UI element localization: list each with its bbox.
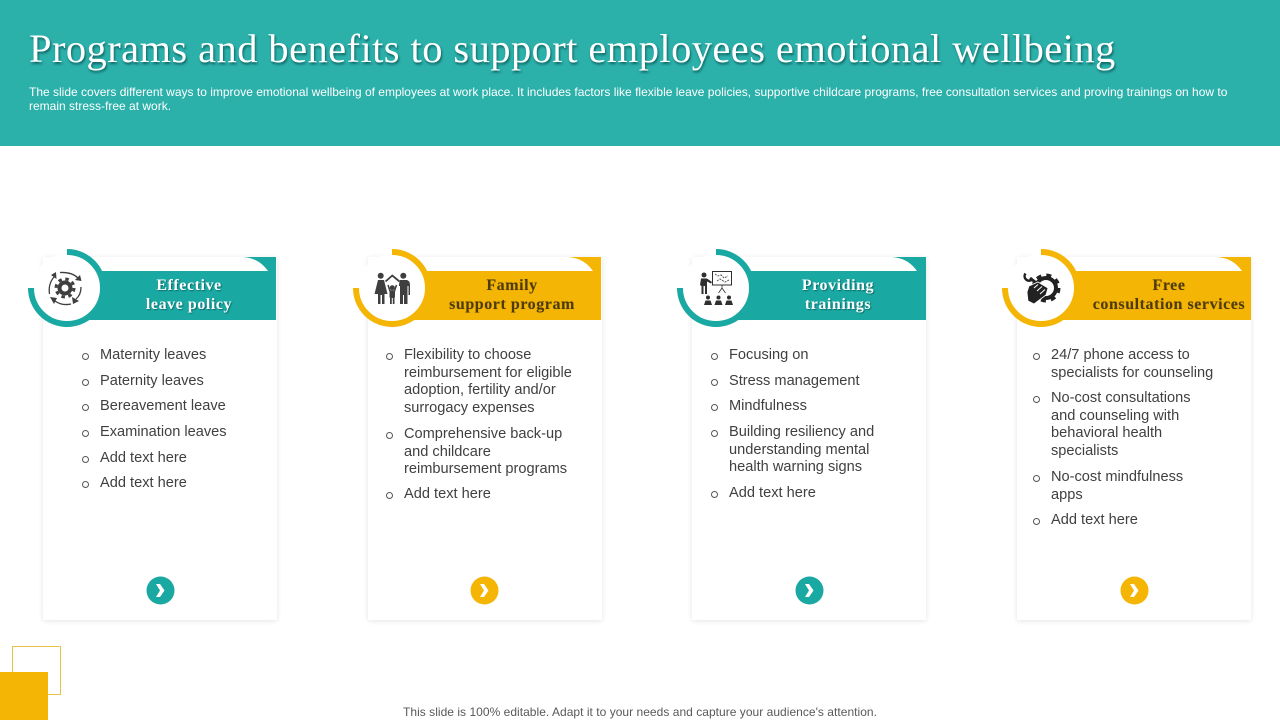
heading — [802, 277, 875, 314]
list item: Comprehensive back-up — [404, 426, 562, 442]
list item — [404, 347, 572, 418]
list item: Building resiliency and — [729, 424, 874, 440]
title: Programs and benefits to support employees emotional wellbeing — [29, 26, 1116, 71]
bullet list — [82, 347, 227, 491]
list item: Bereavement leave — [100, 398, 226, 414]
list item: 24/7 phone access to — [1051, 347, 1190, 363]
icon: arrow button — [470, 576, 498, 604]
card header with ring and support icon — [1002, 249, 1251, 327]
card header with ring and training icon — [677, 249, 926, 327]
panel: providing trainings — [677, 249, 928, 622]
list item — [729, 424, 874, 477]
icon: arrow button — [1120, 576, 1148, 604]
list item: Focusing on — [729, 347, 809, 363]
icon: presenter at board with audience — [700, 272, 733, 305]
heading: Family — [486, 277, 538, 294]
icon: arrow button — [796, 576, 824, 604]
list item — [1051, 390, 1191, 461]
footer note: This slide is 100% editable. Adapt it to your needs and capture your audience's attention. — [403, 705, 877, 719]
panel: free consultation services — [1002, 249, 1252, 622]
list item: Add text here — [404, 486, 491, 502]
list item: understanding mental — [729, 442, 869, 458]
list item: Add text here — [729, 485, 816, 501]
icon: hand with wrench and gear — [1025, 274, 1059, 304]
list item: No-cost mindfulness — [1051, 469, 1183, 485]
icon: arrow button — [146, 576, 174, 604]
header banner — [0, 0, 1280, 146]
heading: Free — [1152, 277, 1186, 294]
heading: leave policy — [146, 296, 232, 313]
list item: Add text here — [100, 450, 187, 466]
card header with ring and family icon — [353, 249, 601, 327]
subtitle description: The slide covers different ways to improve emotional wellbeing of employees at work place. It includes factors like flexible leave policies, supportive childcare programs, free consultation services and proving trainings on how to — [29, 85, 1227, 99]
heading: Effective — [156, 277, 222, 294]
heading — [146, 277, 232, 314]
list item: reimbursement programs — [404, 461, 567, 477]
list item: health warning signs — [729, 459, 862, 475]
heading: trainings — [805, 296, 871, 313]
list item: specialists for counseling — [1051, 365, 1213, 381]
bullet list — [1033, 347, 1213, 528]
subtitle description — [29, 85, 1227, 113]
list item: No-cost consultations — [1051, 390, 1191, 406]
icon: gear with cycle arrows — [49, 272, 82, 305]
list item: and childcare — [404, 444, 491, 460]
list item: Add text here — [100, 475, 187, 491]
list item: specialists — [1051, 443, 1118, 459]
bullet list — [386, 347, 572, 502]
panel: family support program — [353, 249, 604, 622]
heading — [449, 277, 575, 313]
list item: reimbursement for eligible — [404, 365, 572, 381]
heading: consultation services — [1093, 296, 1245, 313]
list item: behavioral health — [1051, 425, 1162, 441]
corner decoration: outlined square — [12, 646, 61, 695]
list item: Add text here — [1051, 512, 1138, 528]
list item: Examination leaves — [100, 424, 227, 440]
list item: Stress management — [729, 373, 860, 389]
list item: and counseling with — [1051, 408, 1179, 424]
card header with ring and gear icon — [28, 249, 276, 327]
icon: family under roof — [374, 273, 410, 304]
list item — [1051, 347, 1213, 382]
heading: support program — [449, 296, 575, 313]
list item — [1051, 469, 1183, 504]
panel: effective leave policy — [28, 249, 278, 622]
list item — [404, 426, 567, 479]
list item: Flexibility to choose — [404, 347, 531, 363]
list item: Maternity leaves — [100, 347, 206, 363]
subtitle description: remain stress-free at work. — [29, 99, 171, 113]
list item: surrogacy expenses — [404, 400, 535, 416]
corner decoration: filled square — [0, 672, 48, 720]
heading: Providing — [802, 277, 874, 294]
list item: Mindfulness — [729, 398, 807, 414]
heading — [1093, 277, 1245, 313]
list item: adoption, fertility and/or — [404, 382, 556, 398]
bullet list — [711, 347, 874, 501]
list item: Paternity leaves — [100, 373, 204, 389]
list item: apps — [1051, 487, 1083, 503]
